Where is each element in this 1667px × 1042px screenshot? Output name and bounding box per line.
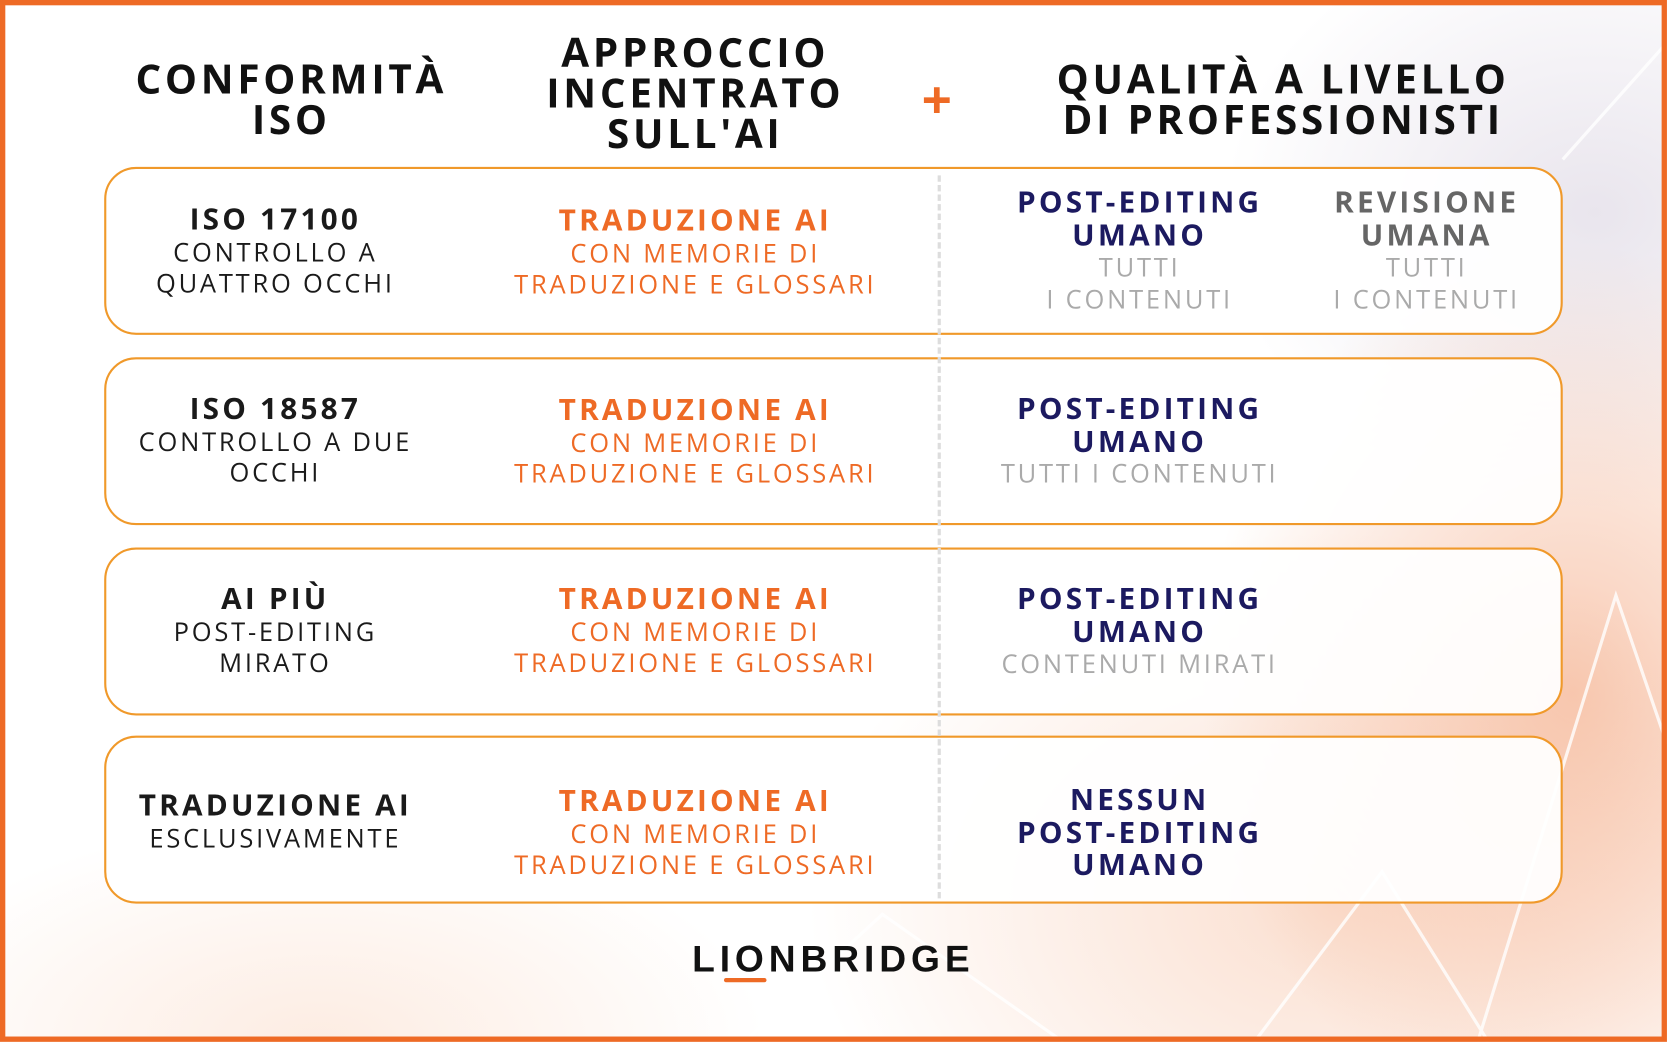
text: UMANO — [1072, 214, 1207, 255]
header: conformità ISO — [135, 51, 447, 147]
row4 texts: ESCLUSIVAMENTE — [149, 820, 401, 855]
text: NESSUN — [1070, 779, 1209, 820]
header: conformità ISO: CONFORMITÀ — [135, 51, 447, 106]
text: CON MEMORIE DI — [570, 614, 820, 649]
text: TRADUZIONE AI — [559, 578, 832, 619]
text: CON MEMORIE DI — [570, 425, 820, 460]
logo: LIONBRIDGE — [692, 939, 975, 980]
text: TRADUZIONE AI — [559, 389, 832, 429]
text: TUTTI — [1099, 250, 1180, 285]
text: TRADUZIONE AI — [559, 780, 832, 821]
row4 texts: TRADUZIONE AI — [139, 785, 412, 825]
row1 texts: ISO 17100 — [190, 199, 361, 239]
row2 texts: CONTROLLO A DUE — [139, 424, 412, 459]
text: I CONTENUTI — [1333, 281, 1520, 316]
row2 texts: OCCHI — [229, 455, 321, 490]
header: qualità: QUALITÀ A LIVELLO — [1057, 51, 1510, 106]
text: POST-EDITING — [1017, 182, 1262, 222]
header: approccio AI — [546, 24, 844, 161]
row3 texts: AI PIÙ — [221, 578, 329, 619]
row3 texts: POST-EDITING — [174, 614, 377, 649]
text: TRADUZIONE E GLOSSARI — [514, 456, 876, 491]
text: CON MEMORIE DI — [570, 235, 820, 271]
header: conformità ISO: ISO — [252, 91, 331, 147]
text: POST-EDITING — [1017, 578, 1262, 619]
row 4 — [104, 736, 1563, 904]
text: TUTTI I CONTENUTI — [1001, 456, 1278, 491]
row 2 — [104, 357, 1563, 525]
text: CONTENUTI MIRATI — [1001, 646, 1278, 681]
text: POST-EDITING — [1017, 388, 1262, 428]
text: POST-EDITING — [1017, 812, 1262, 852]
header: qualità — [1057, 51, 1510, 147]
header: approccio AI: APPROCCIO — [561, 24, 829, 80]
header: approccio AI: SULL'AI — [607, 105, 784, 161]
text: UMANO — [1072, 844, 1207, 884]
row4 texts — [139, 785, 412, 855]
row 3 — [104, 547, 1563, 715]
header: approccio AI: INCENTRATO — [546, 65, 844, 120]
text: UMANO — [1072, 611, 1207, 651]
text: CON MEMORIE DI — [570, 816, 820, 851]
row2 texts — [139, 388, 412, 490]
row2 texts: ISO 18587 — [190, 388, 361, 428]
row1 texts: QUATTRO OCCHI — [156, 266, 395, 301]
row 1 — [104, 167, 1563, 335]
text: TRADUZIONE E GLOSSARI — [514, 847, 876, 882]
text: TRADUZIONE E GLOSSARI — [514, 267, 876, 302]
text: UMANO — [1072, 420, 1207, 461]
text: I CONTENUTI — [1046, 281, 1233, 316]
row1 texts — [156, 199, 395, 301]
row3 texts: MIRATO — [219, 645, 332, 680]
text: UMANA — [1361, 214, 1493, 255]
text: TRADUZIONE E GLOSSARI — [514, 645, 876, 680]
plus icon: + — [922, 63, 956, 135]
header: qualità: DI PROFESSIONISTI — [1063, 91, 1504, 147]
text: REVISIONE — [1334, 182, 1519, 222]
row3 texts — [174, 578, 377, 680]
text: TRADUZIONE AI — [559, 200, 832, 240]
text: TUTTI — [1386, 250, 1468, 285]
row1 texts: CONTROLLO A — [173, 234, 378, 269]
